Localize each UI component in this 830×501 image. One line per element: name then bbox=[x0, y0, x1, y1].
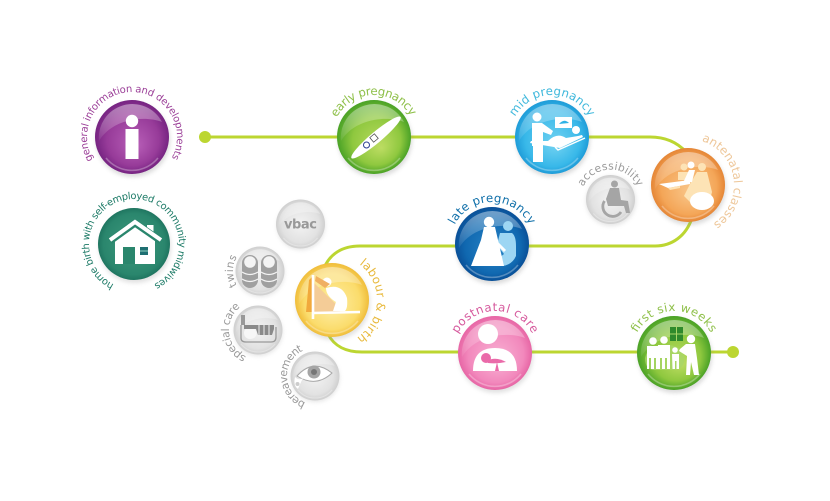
icon: labour scene bbox=[306, 275, 360, 319]
button: antenatal classes bbox=[650, 136, 743, 228]
label: mid pregnancy: mid pregnancy bbox=[510, 88, 594, 116]
button: special care bbox=[220, 304, 284, 361]
icon: twin babies bbox=[242, 255, 277, 288]
icon: wheelchair bbox=[603, 180, 630, 216]
label: antenatal classes: antenatal classes bbox=[702, 136, 743, 228]
button: postnatal care bbox=[452, 302, 537, 394]
label: accessibility: accessibility bbox=[578, 162, 643, 186]
button: mid pregnancy bbox=[510, 88, 594, 178]
icon: ultrasound scan bbox=[530, 112, 585, 162]
label: first six weeks: first six weeks bbox=[630, 302, 716, 332]
label: postnatal care: postnatal care bbox=[452, 302, 537, 334]
button: early pregnancy bbox=[332, 88, 416, 178]
button: first six weeks bbox=[630, 302, 716, 394]
label: late pregnancy: late pregnancy bbox=[447, 196, 535, 224]
icon: pregnancy test bbox=[348, 113, 404, 162]
label: early pregnancy: early pregnancy bbox=[332, 88, 416, 116]
button: accessibility bbox=[578, 162, 643, 227]
icon: class group bbox=[659, 162, 714, 210]
icon: eye with tear bbox=[294, 366, 332, 389]
button: labour and birth bbox=[294, 258, 386, 342]
icon: information bbox=[126, 115, 138, 159]
label: bereavement: bereavement bbox=[281, 345, 305, 410]
icon: family with midwife bbox=[645, 327, 699, 375]
label: home birth: home birth with self-employed community midwives bbox=[82, 192, 186, 290]
button: bereavement bbox=[281, 345, 340, 410]
button: general information bbox=[81, 86, 183, 178]
button: twins bbox=[224, 246, 286, 298]
label: labour and birth: labour & birth bbox=[358, 258, 386, 342]
end dot bbox=[727, 346, 739, 358]
icon: incubator bbox=[241, 315, 276, 342]
button: home birth bbox=[82, 192, 186, 290]
label: vbac: vbac bbox=[284, 218, 317, 232]
button: late pregnancy bbox=[447, 196, 535, 286]
button: vbac bbox=[276, 200, 325, 250]
icon: house bbox=[110, 222, 161, 264]
icon: midwife and mother bbox=[471, 217, 516, 266]
label: twins: twins bbox=[224, 255, 236, 288]
pathway line bbox=[205, 137, 733, 352]
label: special care: special care bbox=[220, 304, 246, 361]
icon: mother and baby bbox=[473, 324, 517, 371]
label: general information: general information and developments bbox=[81, 86, 183, 161]
start dot bbox=[199, 131, 211, 143]
